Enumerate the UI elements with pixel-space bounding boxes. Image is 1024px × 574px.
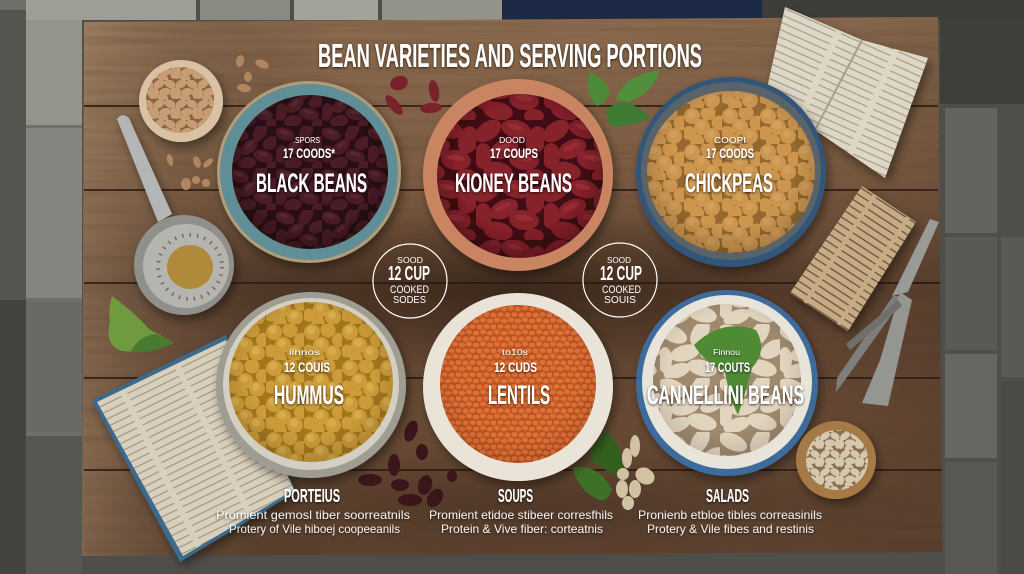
label: hummus: HUMMUS xyxy=(274,380,344,410)
serving badge, right xyxy=(583,243,657,317)
green leaves, top centre xyxy=(588,70,660,126)
label: chickpeas: COOPI xyxy=(714,136,746,145)
open book, top right xyxy=(767,7,928,178)
label: chickpeas: 17 COODS xyxy=(706,145,754,161)
serving badge, right: SOOD xyxy=(607,256,631,265)
loose dark beans, bottom xyxy=(358,419,457,510)
bowl: kidney beans xyxy=(423,79,613,271)
label: lentils: to10s xyxy=(502,348,528,357)
serving badge, left: COOKED xyxy=(390,284,429,296)
label: black beans: 17 COODS* xyxy=(283,145,335,161)
label: hummus: 12 COUIS xyxy=(284,359,330,375)
label: hummus xyxy=(274,348,344,410)
bowl: cannellini beans xyxy=(636,290,818,476)
label: black beans: BLACK BEANS xyxy=(256,168,367,198)
small bowl: white beans xyxy=(796,421,876,499)
measuring cup xyxy=(117,115,234,315)
green leaves, bottom centre with white beans xyxy=(572,432,658,510)
bowl: hummus xyxy=(216,292,406,478)
label: cannellini beans: Finnou xyxy=(713,348,740,357)
caption column: portions: Protery of Vile hiboej coopeeanils xyxy=(229,522,400,536)
serving badge, left: 12 CUP xyxy=(388,263,430,285)
caption column: salads: SALADS xyxy=(706,486,749,506)
bowl: lentils xyxy=(423,293,613,481)
label: kidney beans: 17 COUPS xyxy=(490,145,538,161)
label: chickpeas: CHICKPEAS xyxy=(685,168,773,198)
label: kidney beans: DOOD xyxy=(499,136,525,145)
caption column: portions xyxy=(216,486,410,536)
loose kidney beans, top centre xyxy=(382,73,442,117)
label: hummus: iinnos xyxy=(289,348,320,357)
label: kidney beans xyxy=(455,136,572,198)
open book, bottom left xyxy=(92,335,296,562)
caption column: salads xyxy=(638,486,822,536)
serving badge, left xyxy=(373,244,447,318)
label: black beans: .SPORS xyxy=(293,136,320,145)
loose pinto beans, top left xyxy=(166,54,270,190)
label: lentils xyxy=(488,348,550,410)
caption column: portions: PORTEIUS xyxy=(284,486,340,506)
caption column: portions: Promient gemosl tiber soorreatnils xyxy=(216,508,410,522)
caption column: soups: Protein & Vive fiber: corteatnis xyxy=(441,522,603,536)
caption column: soups xyxy=(429,486,613,536)
label: cannellini beans xyxy=(647,348,804,410)
label: black beans xyxy=(256,136,367,198)
title: BEAN VARIETIES AND SERVING PORTIONS xyxy=(318,37,702,74)
caption column: salads: Pronienb etbloe tibles correasinils xyxy=(638,508,822,522)
serving badge, right: COOKED xyxy=(602,284,641,296)
bowl: chickpeas xyxy=(636,77,826,267)
cutlery, right xyxy=(836,219,939,406)
folded note, right xyxy=(790,186,916,331)
label: lentils: 12 CUDS xyxy=(494,359,537,375)
caption column: salads: Protery & Vile fibes and restinis xyxy=(647,522,814,536)
caption column: soups: Promient etidoe stibeer corresfhils xyxy=(429,508,613,522)
small bowl: pinto beans xyxy=(139,60,223,142)
label: chickpeas xyxy=(685,136,773,198)
label: cannellini beans: CANNELLINI BEANS xyxy=(647,380,804,410)
label: lentils: LENTILS xyxy=(488,380,550,410)
caption column: soups: SOUPS xyxy=(498,486,533,506)
bowl: black beans xyxy=(217,81,401,263)
green leaf, left xyxy=(108,296,174,352)
serving badge, right: SOUIS xyxy=(604,295,636,306)
label: kidney beans: KIONEY BEANS xyxy=(455,168,572,198)
label: cannellini beans: 17 COUTS xyxy=(705,359,750,375)
serving badge, left: SODES xyxy=(393,295,426,306)
serving badge, right: 12 CUP xyxy=(600,263,642,285)
serving badge, left: SOOD xyxy=(397,256,423,265)
